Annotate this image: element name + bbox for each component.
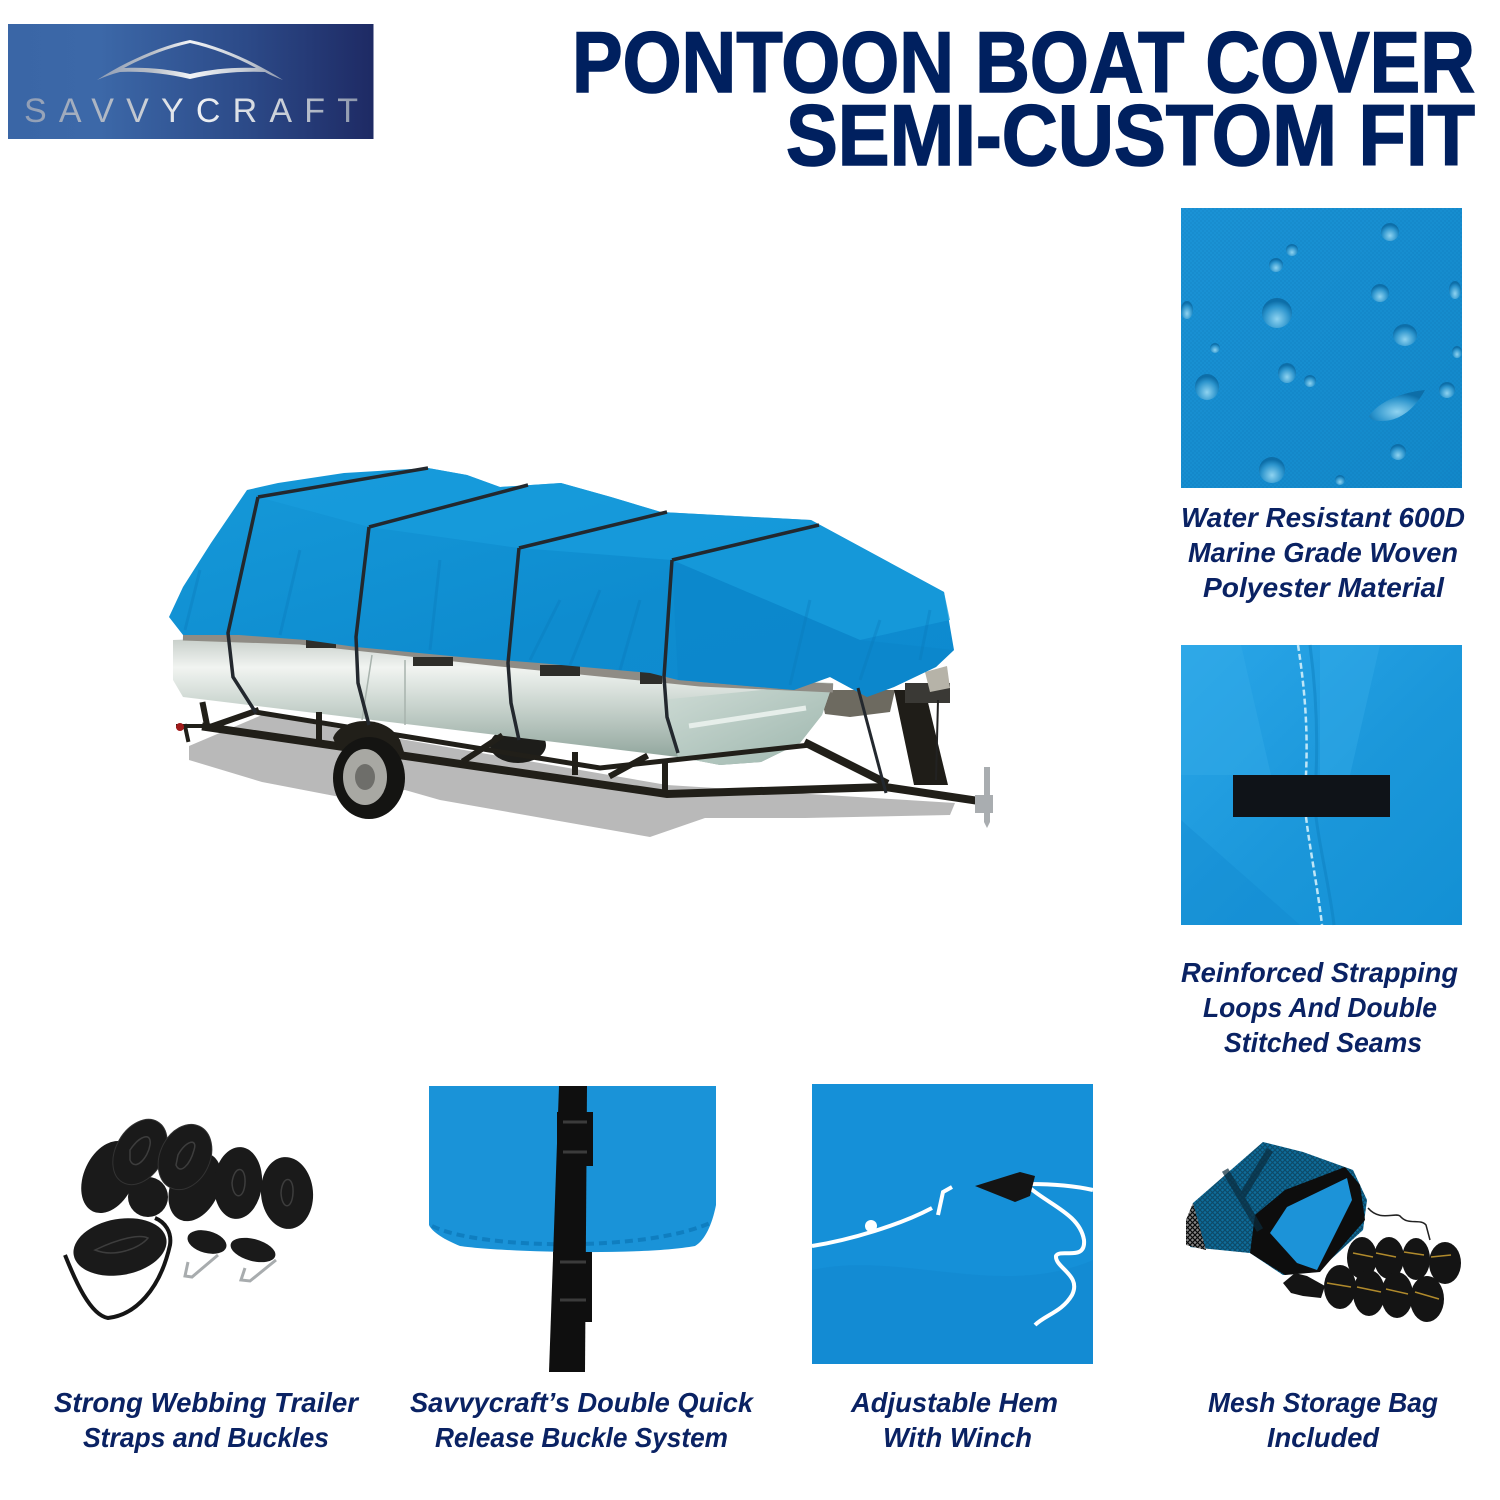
caption: reinforced strapping <box>1181 957 1458 1058</box>
cover straps <box>228 468 886 793</box>
caption: adjustable hem: With Winch <box>883 1422 1032 1453</box>
caption: reinforced strapping: Reinforced Strapping <box>1181 957 1458 988</box>
pontoon tube <box>173 635 833 765</box>
logo mark: boat canopy <box>97 40 283 80</box>
title <box>572 15 1475 184</box>
caption: buckle system: Release Buckle System <box>435 1422 728 1453</box>
caption: adjustable hem: Adjustable Hem <box>850 1387 1058 1418</box>
rope <box>812 1184 1093 1325</box>
logo wordmark: SAVVYCRAFT <box>24 92 358 130</box>
hitch jack <box>975 767 993 828</box>
caption: water resistant material: Marine Grade Woven <box>1188 537 1458 568</box>
trailer frame <box>178 705 972 800</box>
black strap loop <box>1233 775 1390 817</box>
caption: water resistant material: Polyester Material <box>1203 572 1445 603</box>
caption: webbing straps <box>54 1387 360 1453</box>
caption: buckle system: Savvycraft’s Double Quick <box>410 1387 754 1418</box>
boat cover <box>169 468 954 697</box>
panel: mesh storage bag photo <box>1186 1142 1461 1322</box>
caption: water resistant material <box>1181 502 1465 603</box>
caption: reinforced strapping: Stitched Seams <box>1224 1027 1422 1058</box>
wheel and fender <box>333 721 405 819</box>
caption: reinforced strapping: Loops And Double <box>1203 992 1437 1023</box>
hooks <box>185 1255 276 1281</box>
caption: webbing straps: Strong Webbing Trailer <box>54 1387 360 1418</box>
panel: adjustable hem with winch <box>812 1084 1093 1364</box>
caption: mesh bag: Mesh Storage Bag <box>1208 1387 1438 1418</box>
strap and buckles <box>549 1086 593 1372</box>
trailer winch post <box>894 690 948 785</box>
rear wheel <box>490 727 546 763</box>
panel: double quick release buckle <box>429 1086 716 1372</box>
logo: Savvycraft <box>8 24 374 139</box>
panel: webbing trailer straps photo <box>65 1110 316 1318</box>
tail light <box>176 723 184 731</box>
drawstring <box>1368 1208 1430 1240</box>
winch <box>975 1172 1035 1202</box>
coil winding lines <box>95 1137 293 1253</box>
ground shadow <box>189 715 955 837</box>
caption: mesh bag <box>1208 1387 1438 1453</box>
panel: water resistant fabric swatch <box>1181 208 1462 488</box>
water droplets <box>1181 223 1462 485</box>
strap coils <box>1283 1237 1461 1322</box>
bow underside <box>820 690 895 717</box>
caption: adjustable hem <box>850 1387 1058 1453</box>
panel: strapping loop and stitched seam <box>1181 645 1462 925</box>
caption: water resistant material: Water Resistant 600D <box>1181 502 1465 533</box>
caption: buckle system <box>410 1387 754 1453</box>
caption: webbing straps: Straps and Buckles <box>83 1422 329 1453</box>
caption: mesh bag: Included <box>1267 1422 1380 1453</box>
main product image: covered pontoon boat on trailer <box>169 468 993 837</box>
